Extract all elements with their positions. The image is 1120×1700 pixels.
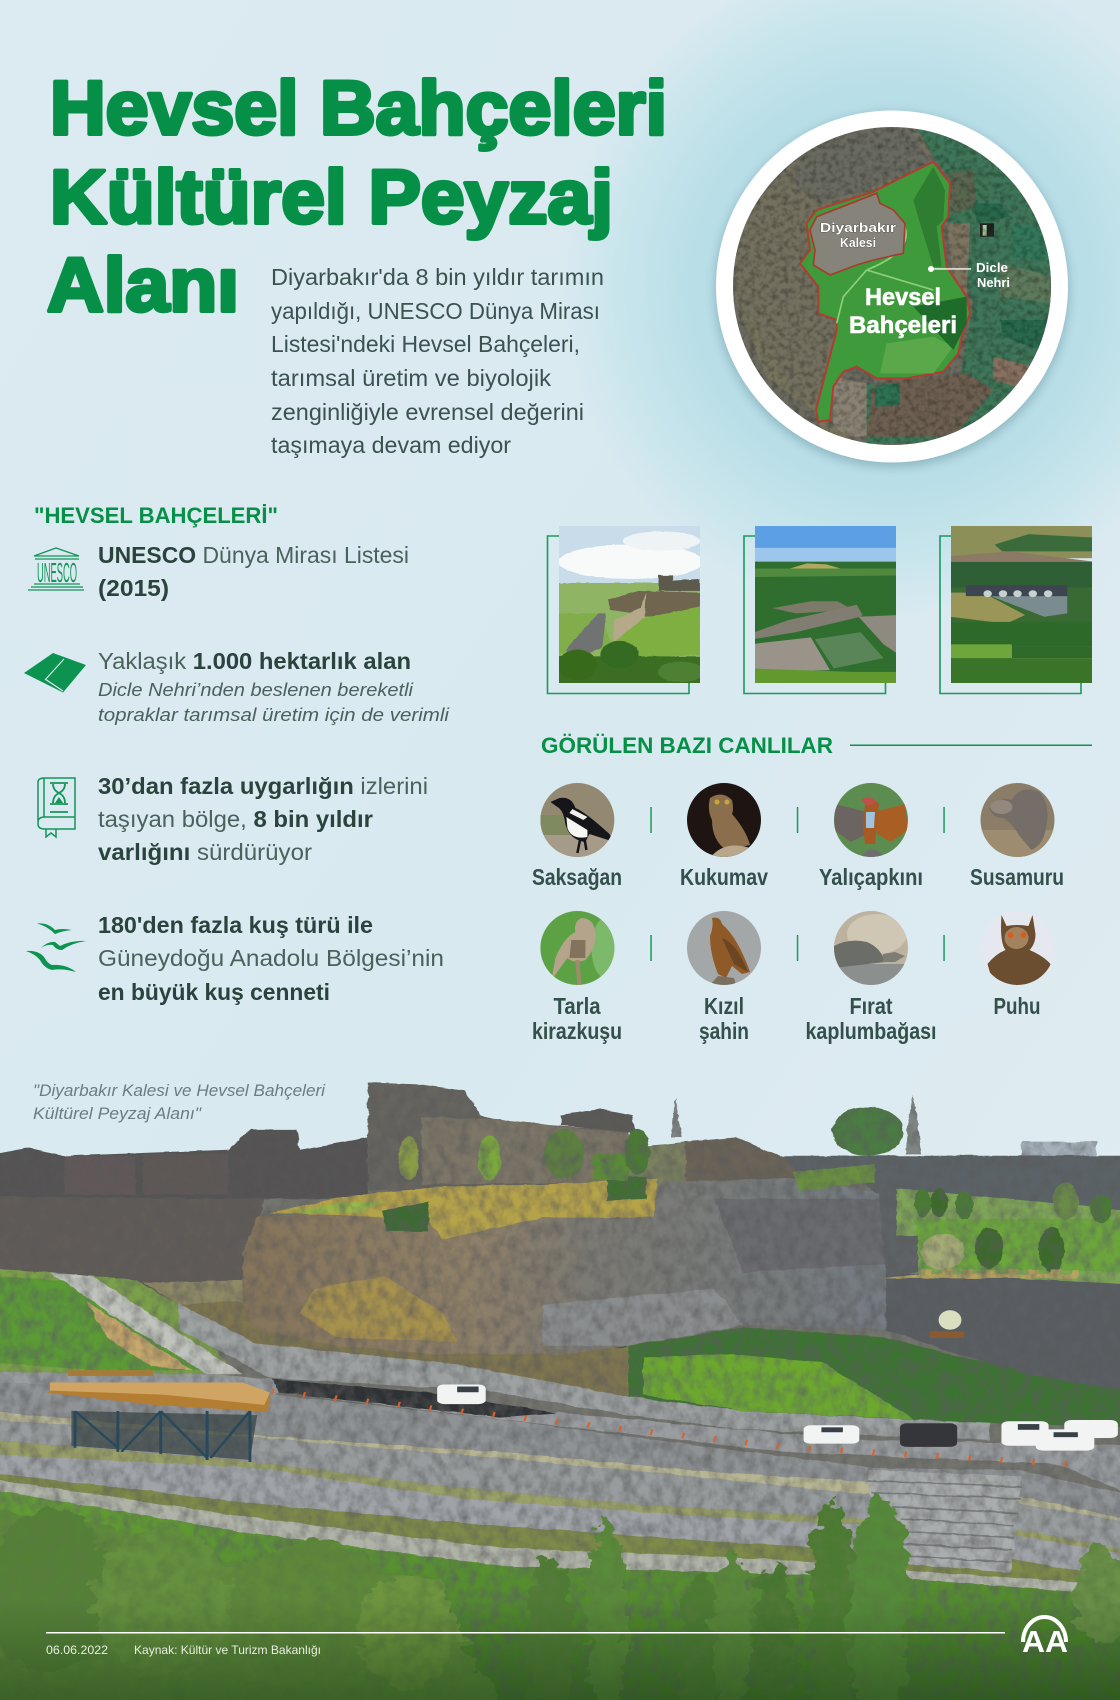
separator (650, 807, 652, 833)
text: 180'den fazla kuş türü: en büyük kuş cenneti (98, 979, 330, 1005)
intro paragraph: taşımaya devam ediyor (271, 432, 511, 458)
text: UNESCO Dünya Mirası Listesi: UNESCO Dünya Mirası Listesi (98, 542, 409, 568)
text: UNESCO Dünya Mirası Listesi (98, 542, 409, 601)
footer date and source (46, 1643, 321, 1657)
separator (797, 935, 798, 961)
icon: UNESCO temple (28, 548, 84, 590)
footer date and source: Kaynak: Kültür ve Turizm Bakanlığı (134, 1643, 321, 1657)
footer line (46, 1632, 1005, 1634)
animal: Puhu (980, 911, 1054, 1019)
text: 30'dan fazla uygarlığın: 30’dan fazla uygarlığın izlerini (98, 773, 428, 799)
grass on cliff (268, 1129, 875, 1240)
animal: Puhu: Puhu (994, 993, 1040, 1019)
text: 1.000 hektarlık alan: Yaklaşık 1.000 hektarlık alan (98, 648, 411, 674)
left garden (0, 1268, 243, 1374)
species grid (532, 783, 1064, 1044)
cliff (243, 1178, 886, 1354)
animal: Susamuru: Susamuru (970, 864, 1064, 890)
text: 180'den fazla kuş türü (98, 912, 444, 1005)
map label: Dicle Nehri: Nehri (977, 275, 1010, 290)
item: civilisations (38, 773, 428, 865)
photo caption (33, 1081, 326, 1123)
animal: Yalıçapkını (819, 783, 923, 890)
upper retaining wall (179, 1304, 989, 1440)
text: 180'den fazla kuş türü: 180'den fazla kuş türü ile (98, 912, 373, 938)
cars (437, 1384, 1118, 1451)
scrub below cliff (179, 1301, 643, 1399)
intro paragraph (271, 264, 604, 458)
map label: Diyarbakır Kalesi: Kalesi (840, 235, 876, 250)
map label: Diyarbakır Kalesi: Diyarbakır (820, 220, 896, 235)
separator (943, 807, 945, 833)
item: birds (26, 912, 444, 1005)
photo panel 3: river and bridge (940, 520, 1096, 694)
section heading: Hevsel Bahçeleri: "HEVSEL BAHÇELERİ" (34, 503, 278, 528)
animal: Kızıl şahin: Kızıl (704, 993, 744, 1019)
animal: Tarla kirazkuşu (532, 911, 622, 1044)
text: Dicle description: Dicle Nehri’nden beslenen bereketli (98, 680, 414, 700)
separator (797, 807, 798, 833)
item: area (24, 648, 450, 725)
intro paragraph: tarımsal üretim ve biyolojik (271, 365, 552, 391)
map label: Hevsel Bahçeleri: Hevsel (865, 284, 941, 311)
map label: Hevsel Bahçeleri: Bahçeleri (849, 312, 957, 339)
animal: Saksağan (532, 783, 622, 890)
animal: Saksağan: Saksağan (532, 864, 622, 890)
trees foreground (0, 1493, 1120, 1700)
animal: Yalıçapkını: Yalıçapkını (819, 864, 923, 890)
text: Dicle description (98, 680, 450, 725)
photo base layer (0, 1154, 1120, 1592)
title: Hevsel Bahçeleri (50, 66, 667, 151)
dark foreground shading (0, 1618, 1120, 1700)
logo: AA: AA (1022, 1624, 1068, 1659)
green slope (629, 1327, 1120, 1427)
road (0, 1372, 1120, 1497)
animal: Tarla kirazkuşu: kirazkuşu (532, 1018, 622, 1044)
photo caption: "Diyarbakır Kalesi ve Hevsel Bahçeleri (33, 1081, 326, 1100)
footer date and source: 06.06.2022 (46, 1643, 108, 1657)
animal: Susamuru (970, 783, 1064, 890)
terraces (0, 1382, 1120, 1593)
title: Kültürel Peyzaj (50, 155, 613, 240)
separator (943, 935, 945, 961)
map circle (715, 110, 1069, 467)
intro paragraph: Diyarbakır'da 8 bin yıldır tarımın (271, 264, 604, 290)
item: UNESCO (28, 542, 409, 601)
deck (46, 1370, 270, 1462)
animal: Tarla kirazkuşu: Tarla (554, 993, 601, 1019)
title (47, 66, 667, 328)
photo panel 1: castle and walls (548, 520, 704, 694)
animal: Fırat kaplumbağası (806, 911, 936, 1044)
section heading: Görülen Bazı Canlılar: GÖRÜLEN BAZI CANLILAR (541, 733, 833, 758)
right wall (864, 1184, 1120, 1393)
text: 30'dan fazla uygarlığın (98, 773, 428, 865)
text: UNESCO Dünya Mirası Listesi: (2015) (98, 575, 169, 601)
separator (650, 935, 652, 961)
text: 30'dan fazla uygarlığın: taşıyan bölge, 8 bin yıldır (98, 806, 373, 832)
animal: Fırat kaplumbağası: Fırat (850, 993, 893, 1019)
text: 30'dan fazla uygarlığın: varlığını sürdürüyor (98, 839, 312, 865)
photo caption: Kültürel Peyzaj Alanı" (33, 1104, 202, 1123)
steps (868, 1470, 1021, 1572)
map label: Hevsel Bahçeleri (849, 284, 957, 339)
bottom meadow (0, 1489, 1120, 1700)
animal: Kukumav: Kukumav (680, 864, 768, 890)
title: Alanı (47, 243, 239, 328)
photo panel 2: cultivated fields (744, 520, 903, 694)
item: UNESCO: UNESCO (37, 557, 77, 588)
icon: flying birds (26, 923, 86, 972)
icon: land parcel (24, 653, 86, 692)
animal: Kızıl şahin: şahin (699, 1018, 749, 1044)
intro paragraph: zenginliğiyle evrensel değerini (271, 399, 584, 425)
map label: Diyarbakır Kalesi (820, 220, 896, 250)
left rock slope (0, 1197, 264, 1305)
icon: book with hourglass (38, 778, 75, 837)
map label: Dicle Nehri: Dicle (976, 260, 1008, 275)
animal: Kukumav (680, 783, 768, 890)
wall window and details (46, 1310, 1118, 1464)
map label: Dicle Nehri (928, 260, 1010, 290)
intro paragraph: yapıldığı, UNESCO Dünya Mirası (271, 298, 600, 324)
animal: Fırat kaplumbağası: kaplumbağası (806, 1018, 936, 1044)
bottom photo: Diyarbakır castle and Hevsel terraces (0, 1082, 1120, 1700)
right garden (896, 1182, 1120, 1284)
intro paragraph: Listesi'ndeki Hevsel Bahçeleri, (271, 331, 580, 357)
text: Dicle description: topraklar tarımsal üretim için de verimli (98, 705, 450, 725)
text: 180'den fazla kuş türü: Güneydoğu Anadolu Bölgesi’nin (98, 945, 444, 971)
animal: Kızıl şahin (687, 911, 761, 1044)
castle skyline (0, 1082, 1120, 1213)
